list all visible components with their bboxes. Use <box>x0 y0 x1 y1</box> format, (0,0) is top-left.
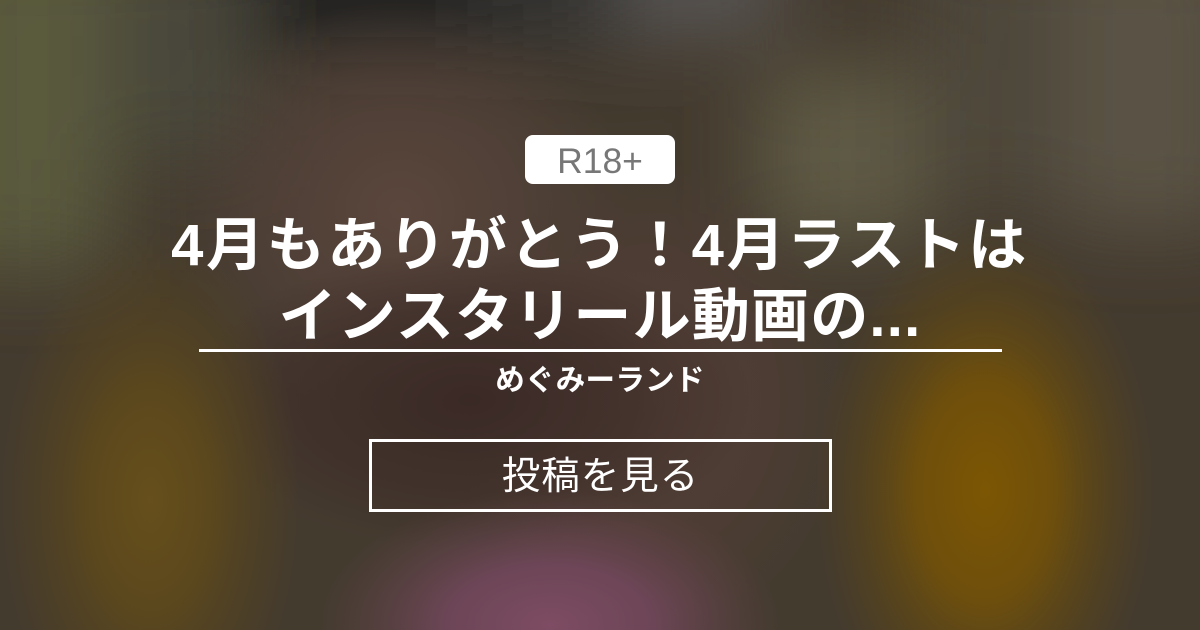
title underline <box>199 349 1002 352</box>
title <box>171 213 1029 349</box>
button: view post <box>369 439 832 512</box>
badge: R18+: R18+ <box>557 141 643 181</box>
title: インスタリール動画の... <box>279 284 921 349</box>
button: view post: 投稿を見る <box>502 455 699 498</box>
badge: R18+ <box>525 135 675 184</box>
author name: めぐみーランド <box>495 364 705 397</box>
title: 4月もありがとう！4月ラストは <box>171 213 1029 278</box>
